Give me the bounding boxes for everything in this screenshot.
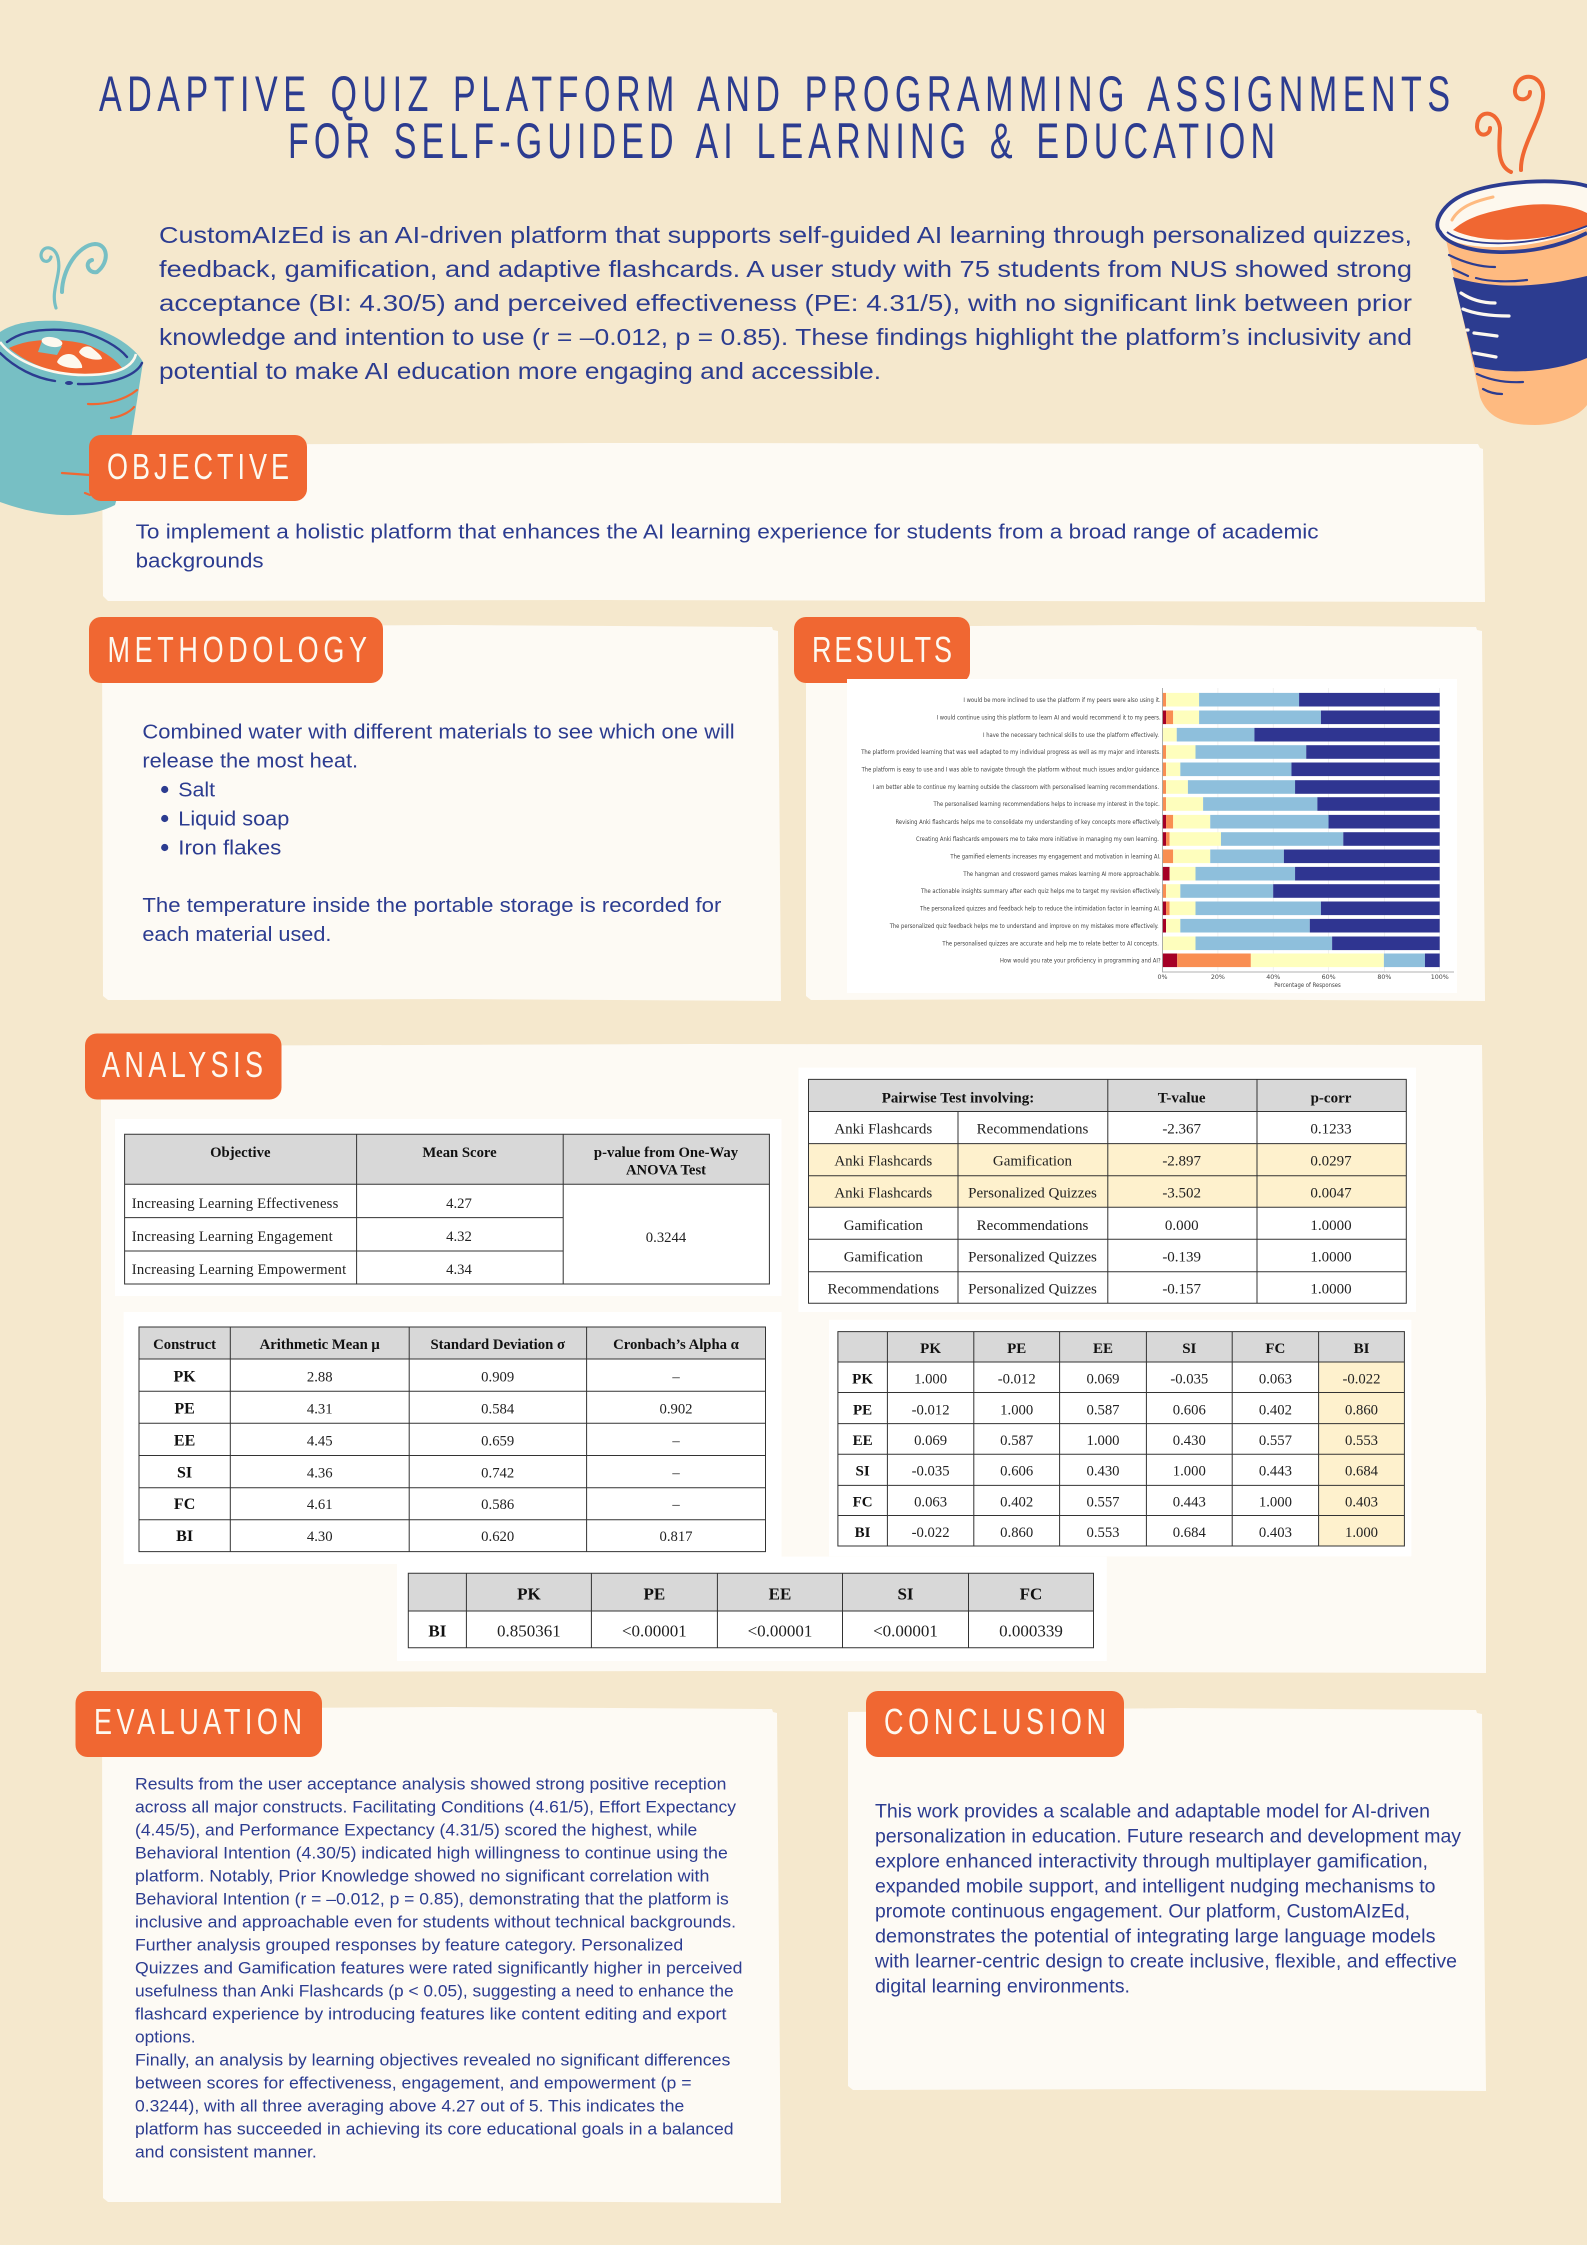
chart axes and tick labels: 80% [1377, 974, 1391, 981]
evaluation text: platform. Notably, Prior Knowledge showed no significant correlation with [135, 1868, 709, 1886]
bar row 11: The hangman and crossword games makes learning AI more approachable. [963, 871, 1161, 878]
bullet list of materials [161, 779, 289, 859]
table: construct statistics: 0.586 [481, 1497, 514, 1513]
table: pairwise tests: Personalized Quizzes [968, 1249, 1097, 1265]
table: objective mean scores and ANOVA: Increasing Learning Empowerment [132, 1262, 346, 1278]
table: correlation matrix: 1.000 [1259, 1494, 1292, 1510]
table: correlation matrix: 0.402 [1000, 1494, 1033, 1510]
evaluation text: Quizzes and Gamification features were rated significantly higher in perceived [135, 1960, 742, 1978]
methodology text: release the most heat. [142, 750, 358, 772]
bar row 4: The platform provided learning that was well adapted to my individual progress as well as my major and interests. [860, 749, 1161, 756]
bar row 10 [950, 850, 1440, 863]
header row: PE [1007, 1341, 1026, 1357]
table: pairwise tests: Gamification [844, 1249, 923, 1265]
table: construct statistics: 0.659 [481, 1434, 514, 1450]
header row: Construct [153, 1337, 216, 1353]
evaluation text [135, 1776, 742, 2162]
bar row 6 [873, 780, 1440, 794]
table: objective mean scores and ANOVA: 4.27 [446, 1196, 472, 1212]
table: correlation matrix: 0.443 [1173, 1494, 1206, 1510]
intro text block: acceptance (BI: 4.30/5) and perceived effectiveness (PE: 4.31/5), with no significant link between prior [159, 290, 1412, 316]
table: correlation matrix: PE [853, 1402, 872, 1418]
evaluation text: flashcard experience by introducing features like content editing and export [135, 2006, 727, 2024]
header row [920, 1341, 1370, 1357]
table: correlation matrix: 0.069 [1086, 1372, 1120, 1388]
table: correlation matrix: PK [852, 1372, 873, 1388]
table: correlation matrix: 0.606 [1000, 1464, 1033, 1480]
table: pairwise tests: Anki Flashcards [834, 1186, 932, 1202]
header row: Cronbach’s Alpha α [613, 1337, 740, 1353]
panel: objective [102, 443, 1485, 602]
chart axes and tick labels [1158, 688, 1454, 989]
table: pairwise tests: 0.000 [1165, 1218, 1199, 1234]
evaluation text: across all major constructs. Facilitating Conditions (4.61/5), Effort Expectancy [135, 1798, 737, 1816]
table: correlation matrix: 0.063 [914, 1494, 947, 1510]
table: pairwise tests: 1.0000 [1310, 1218, 1352, 1234]
chart axes and tick labels: 100% [1431, 974, 1449, 981]
table: construct statistics: 4.30 [307, 1529, 333, 1545]
heading: analysis [85, 1034, 282, 1100]
table: pairwise tests: Recommendations [977, 1122, 1088, 1138]
header row [882, 1090, 1352, 1106]
evaluation text: options. [135, 2028, 196, 2046]
table: pairwise tests: Anki Flashcards [834, 1154, 932, 1170]
table: correlation matrix: 0.069 [914, 1433, 947, 1449]
table: correlation matrix: 0.606 [1173, 1402, 1206, 1418]
header row: p-value from One-Way [594, 1145, 739, 1161]
table: correlation matrix: 1.000 [1000, 1402, 1033, 1418]
table: construct statistics: 4.31 [307, 1401, 333, 1417]
bar row 11 [963, 867, 1440, 880]
header row: p-corr [1311, 1090, 1352, 1106]
header row: PK [920, 1341, 941, 1357]
chart axes and tick labels: 60% [1322, 974, 1336, 981]
evaluation text: platform has succeeded in achieving its core educational goals in a balanced [135, 2120, 734, 2138]
stacked bar chart: survey responses [847, 679, 1457, 993]
table: BI p-values: BI [428, 1622, 447, 1641]
header row: EE [769, 1584, 791, 1603]
table: objective mean scores and ANOVA [115, 1119, 782, 1296]
evaluation text: usefulness than Anki Flashcards (p < 0.05), suggesting a need to enhance the [135, 1982, 734, 2000]
bar row 2 [937, 710, 1440, 724]
bar row 13: The personalized quizzes and feedback help to reduce the intimidation factor in learning AI. [919, 906, 1161, 912]
table: correlation matrix: 0.430 [1086, 1464, 1120, 1480]
table: correlation matrix: SI [856, 1464, 870, 1480]
heading: conclusion [866, 1691, 1124, 1757]
table: pairwise tests [798, 1068, 1416, 1312]
table: correlation matrix: -0.022 [912, 1525, 950, 1541]
bar row 5 [861, 762, 1440, 776]
table: correlation matrix: EE [853, 1433, 873, 1449]
header row: PK [517, 1584, 541, 1603]
table: construct statistics: PE [174, 1400, 195, 1417]
evaluation text: inclusive and approachable even for students without technical backgrounds. [135, 1914, 736, 1932]
table: correlation matrix: 0.684 [1173, 1525, 1206, 1541]
bullet list of materials: Salt [178, 779, 216, 801]
bar row 7: The personalised learning recommendations helps to increase my interest in the topic. [933, 801, 1160, 808]
bar row 15 [942, 936, 1440, 950]
table: construct statistics: – [671, 1434, 680, 1450]
table: BI p-values: <0.00001 [873, 1622, 938, 1641]
bar row 12 [920, 884, 1440, 898]
table: BI p-values: 0.850361 [497, 1622, 561, 1641]
table: construct statistics: 0.902 [659, 1401, 693, 1417]
chart axes and tick labels: 40% [1266, 974, 1280, 981]
panel: analysis [101, 1044, 1486, 1673]
header row [517, 1584, 1042, 1603]
bar row 16: How would you rate your proficiency in programming and AI? [1000, 958, 1161, 964]
table: construct statistics: 4.45 [307, 1434, 333, 1450]
table: pairwise tests: 0.0047 [1310, 1186, 1352, 1202]
heading: methodology: METHODOLOGY [107, 629, 367, 670]
table: construct statistics: 0.584 [481, 1401, 515, 1417]
evaluation text: Behavioral Intention (4.30/5) indicated high willingness to continue using the [135, 1844, 728, 1862]
table: correlation matrix: 0.553 [1086, 1525, 1120, 1541]
table: pairwise tests: Recommendations [977, 1218, 1088, 1234]
table: pairwise tests: -0.139 [1162, 1249, 1201, 1265]
chart axes and tick labels: 20% [1211, 974, 1225, 981]
table: correlation matrix: -0.012 [912, 1402, 950, 1418]
bar row 13 [919, 902, 1440, 915]
table: correlation matrix: -0.035 [912, 1464, 950, 1480]
evaluation text: Results from the user acceptance analysis showed strong positive reception [135, 1776, 726, 1794]
bar row 1: I would be more inclined to use the platform if my peers were also using it. [963, 697, 1161, 704]
methodology text: Combined water with different materials to see which one will [142, 721, 735, 743]
table: correlation matrix: 1.000 [1086, 1433, 1120, 1449]
bar row 12: The actionable insights summary after each quiz helps me to target my revision effectively. [920, 888, 1161, 895]
table: correlation matrix: 1.000 [914, 1372, 947, 1388]
table: correlation matrix: FC [853, 1494, 873, 1510]
evaluation text: Behavioral Intention (r = –0.012, p = 0.85), demonstrating that the platform is [135, 1890, 729, 1908]
objective text [136, 520, 1319, 572]
bar row 9: Creating Anki flashcards empowers me to take more initiative in managing my own learning. [916, 836, 1159, 843]
table: correlation matrix: 0.430 [1173, 1433, 1206, 1449]
table: correlation matrix: 0.403 [1259, 1525, 1292, 1541]
bar row 3 [983, 728, 1440, 742]
evaluation text: Finally, an analysis by learning objectives revealed no significant differences [135, 2052, 730, 2070]
table: construct statistics: FC [174, 1496, 195, 1513]
conclusion text: digital learning environments. [875, 1975, 1130, 1997]
icon: orange cup with steam [1437, 77, 1587, 425]
table: construct statistics: EE [174, 1433, 195, 1450]
bar row 10: The gamified elements increases my engagement and motivation in learning AI. [950, 854, 1161, 860]
table: construct statistics: 0.620 [481, 1529, 514, 1545]
table: pairwise tests: 1.0000 [1310, 1281, 1352, 1297]
table: BI p-values: <0.00001 [622, 1622, 687, 1641]
intro text block: CustomAIzEd is an AI-driven platform that supports self-guided AI learning through personalized quizzes, [159, 222, 1412, 248]
table: BI p-values: <0.00001 [748, 1622, 812, 1641]
table: correlation matrix: 0.684 [1345, 1464, 1379, 1480]
table: construct statistics: 2.88 [307, 1370, 333, 1386]
table: correlation matrix: 0.860 [1000, 1525, 1033, 1541]
evaluation text: (4.45/5), and Performance Expectancy (4.31/5) scored the highest, while [135, 1822, 697, 1840]
table: pairwise tests: 0.0297 [1310, 1154, 1352, 1170]
table: correlation matrix: 0.402 [1259, 1402, 1292, 1418]
panel: results [806, 625, 1485, 1001]
bar row 14: The personalized quiz feedback helps me to understand and improve on my mistakes more effectively. [889, 923, 1159, 930]
table: correlation matrix: -0.012 [998, 1372, 1036, 1388]
conclusion text [874, 1800, 1461, 1997]
conclusion text: This work provides a scalable and adaptable model for AI-driven [875, 1800, 1430, 1822]
conclusion text: promote continuous engagement. Our platform, CustomAIzEd, [875, 1900, 1410, 1922]
bar row 14 [889, 919, 1440, 932]
table: correlation matrix: 0.403 [1345, 1494, 1378, 1510]
header row [153, 1337, 740, 1353]
conclusion text: personalization in education. Future research and development may [875, 1825, 1461, 1847]
table: correlation matrix: 0.063 [1259, 1372, 1292, 1388]
table: construct statistics: 0.909 [481, 1370, 514, 1386]
table: construct statistics: – [671, 1370, 680, 1386]
header row: PE [644, 1584, 665, 1603]
table: objective mean scores and ANOVA: Increasing Learning Engagement [132, 1229, 333, 1245]
table: pairwise tests: Gamification [844, 1218, 923, 1234]
objective text: backgrounds [136, 550, 264, 572]
header row: FC [1020, 1584, 1042, 1603]
header row: Objective [210, 1145, 271, 1161]
table: construct statistics: BI [176, 1528, 193, 1545]
evaluation text: Further analysis grouped responses by feature category. Personalized [135, 1936, 683, 1954]
table: construct statistics: – [671, 1497, 680, 1513]
conclusion text: expanded mobile support, and intelligent nudging mechanisms to [875, 1875, 1436, 1897]
table: pairwise tests: -3.502 [1162, 1186, 1201, 1202]
evaluation text: 0.3244), with all three averaging above 4.27 out of 5. This indicates the [135, 2098, 684, 2116]
evaluation text: and consistent manner. [135, 2144, 317, 2162]
bar row 4 [860, 745, 1440, 759]
table: objective mean scores and ANOVA: Increasing Learning Effectiveness [132, 1196, 339, 1212]
conclusion text: demonstrates the potential of integrating large language models [875, 1925, 1436, 1947]
table: pairwise tests: -2.367 [1162, 1122, 1202, 1138]
header row: EE [1093, 1341, 1113, 1357]
table: correlation matrix: 1.000 [1173, 1464, 1206, 1480]
methodology text: The temperature inside the portable storage is recorded for [142, 895, 722, 917]
panel: evaluation [102, 1707, 781, 2203]
table: pairwise tests: 0.1233 [1310, 1122, 1352, 1138]
table: correlation matrix: -0.035 [1170, 1372, 1208, 1388]
bar row 16 [1000, 954, 1440, 967]
conclusion text: explore enhanced interactivity through multiplayer gamification, [875, 1850, 1428, 1872]
heading: results: RESULTS [812, 629, 952, 670]
table: pairwise tests: Personalized Quizzes [968, 1186, 1097, 1202]
header row [210, 1145, 739, 1178]
header row: BI [1354, 1341, 1370, 1357]
table: correlation matrix: BI [855, 1525, 871, 1541]
table: construct statistics: PK [173, 1368, 196, 1386]
header row: Standard Deviation σ [430, 1337, 565, 1353]
table: pairwise tests: 1.0000 [1310, 1249, 1352, 1265]
objective text: To implement a holistic platform that enhances the AI learning experience for students from a broad range of academic [136, 520, 1319, 544]
table: correlation matrix: 0.553 [1345, 1433, 1378, 1449]
table: construct statistics: 0.817 [659, 1529, 693, 1545]
bar row 5: The platform is easy to use and I was able to navigate through the platform without much issues and/or guidance. [861, 766, 1161, 774]
title: ADAPTIVE QUIZ PLATFORM AND PROGRAMMING ASSIGNMENTS [99, 67, 1450, 123]
table: objective mean scores and ANOVA: 4.32 [446, 1229, 472, 1245]
header row: SI [1182, 1341, 1197, 1357]
table: objective mean scores and ANOVA: 0.3244 [646, 1230, 687, 1246]
table: correlation matrix: 0.443 [1259, 1464, 1292, 1480]
bar row 6: I am better able to continue my learning outside the classroom with personalised learning recommendations. [873, 784, 1159, 791]
heading: analysis: ANALYSIS [102, 1044, 263, 1085]
table: BI p-values: 0.000339 [999, 1622, 1063, 1641]
header row: T-value [1158, 1090, 1206, 1106]
bar row 15: The personalised quizzes are accurate and help me to relate better to AI concepts. [942, 940, 1159, 948]
header row: Mean Score [422, 1145, 497, 1161]
panel: conclusion [848, 1708, 1486, 2091]
conclusion text: with learner-centric design to create inclusive, flexible, and effective [874, 1950, 1457, 1972]
methodology text [142, 721, 735, 946]
table: construct statistics: 4.61 [307, 1497, 333, 1513]
icon: teal cup with marshmallows and steam [0, 244, 143, 515]
bar row 9 [916, 832, 1440, 846]
intro text block: potential to make AI education more engaging and accessible. [159, 358, 881, 384]
heading: objective [89, 435, 307, 501]
panel: methodology [102, 625, 781, 1001]
heading: conclusion: CONCLUSION [884, 1701, 1106, 1742]
bullet list of materials: Liquid soap [178, 808, 289, 830]
table: construct statistics: 0.742 [481, 1466, 514, 1482]
bar row 8: Revising Anki flashcards helps me to consolidate my understanding of key concepts more effectively. [896, 819, 1161, 826]
table: pairwise tests: -0.157 [1162, 1281, 1202, 1297]
bar row 3: I have the necessary technical skills to use the platform effectively. [983, 732, 1159, 739]
heading: results [794, 617, 970, 683]
heading: evaluation: EVALUATION [94, 1701, 302, 1742]
table: pairwise tests: Anki Flashcards [834, 1122, 932, 1138]
table: correlation matrix: 0.587 [1086, 1402, 1120, 1418]
table: pairwise tests: Personalized Quizzes [968, 1281, 1097, 1297]
chart axes and tick labels: Percentage of Responses [1274, 982, 1341, 989]
table: construct statistics: SI [177, 1465, 192, 1482]
header row: ANOVA Test [626, 1162, 706, 1178]
table: correlation matrix: 1.000 [1345, 1525, 1378, 1541]
bar row 8 [896, 815, 1440, 828]
table: construct statistics [124, 1312, 782, 1564]
table: correlation matrix: 0.860 [1345, 1402, 1378, 1418]
heading: evaluation [76, 1691, 322, 1757]
table: pairwise tests: -2.897 [1162, 1154, 1202, 1170]
title: FOR SELF-GUIDED AI LEARNING & EDUCATION [288, 114, 1275, 170]
evaluation text: between scores for effectiveness, engagement, and empowerment (p = [135, 2074, 692, 2092]
table: construct statistics: 4.36 [307, 1466, 333, 1482]
bar row 7 [933, 797, 1440, 811]
table: construct statistics: – [671, 1466, 680, 1482]
header row: Pairwise Test involving: [882, 1090, 1034, 1106]
intro text block: knowledge and intention to use (r = –0.012, p = 0.85). These findings highlight the platform’s inclusivity and [159, 324, 1412, 350]
heading: objective: OBJECTIVE [107, 446, 289, 487]
table: correlation matrix: -0.022 [1343, 1372, 1380, 1388]
table: BI p-values [397, 1557, 1107, 1661]
table: correlation matrix: 0.557 [1086, 1494, 1120, 1510]
chart axes and tick labels: 0% [1158, 974, 1168, 981]
table: pairwise tests: Recommendations [827, 1281, 939, 1297]
bullet list of materials: Iron flakes [178, 837, 281, 859]
heading: methodology [89, 617, 383, 683]
table: pairwise tests: Gamification [993, 1154, 1073, 1170]
bar row 2: I would continue using this platform to learn AI and would recommend it to my peers. [937, 714, 1161, 722]
bar row 1 [963, 693, 1440, 706]
intro text block: feedback, gamification, and adaptive flashcards. A user study with 75 students from NUS showed strong [159, 256, 1412, 282]
title [99, 67, 1450, 170]
header row: FC [1265, 1341, 1285, 1357]
table: correlation matrix [829, 1320, 1411, 1556]
header row: Arithmetic Mean μ [260, 1337, 380, 1353]
table: objective mean scores and ANOVA: 4.34 [446, 1262, 473, 1278]
methodology text: each material used. [142, 924, 331, 946]
intro text block [159, 222, 1412, 384]
table: correlation matrix: 0.557 [1259, 1433, 1292, 1449]
header row: SI [897, 1584, 914, 1603]
table: correlation matrix: 0.587 [1000, 1433, 1033, 1449]
